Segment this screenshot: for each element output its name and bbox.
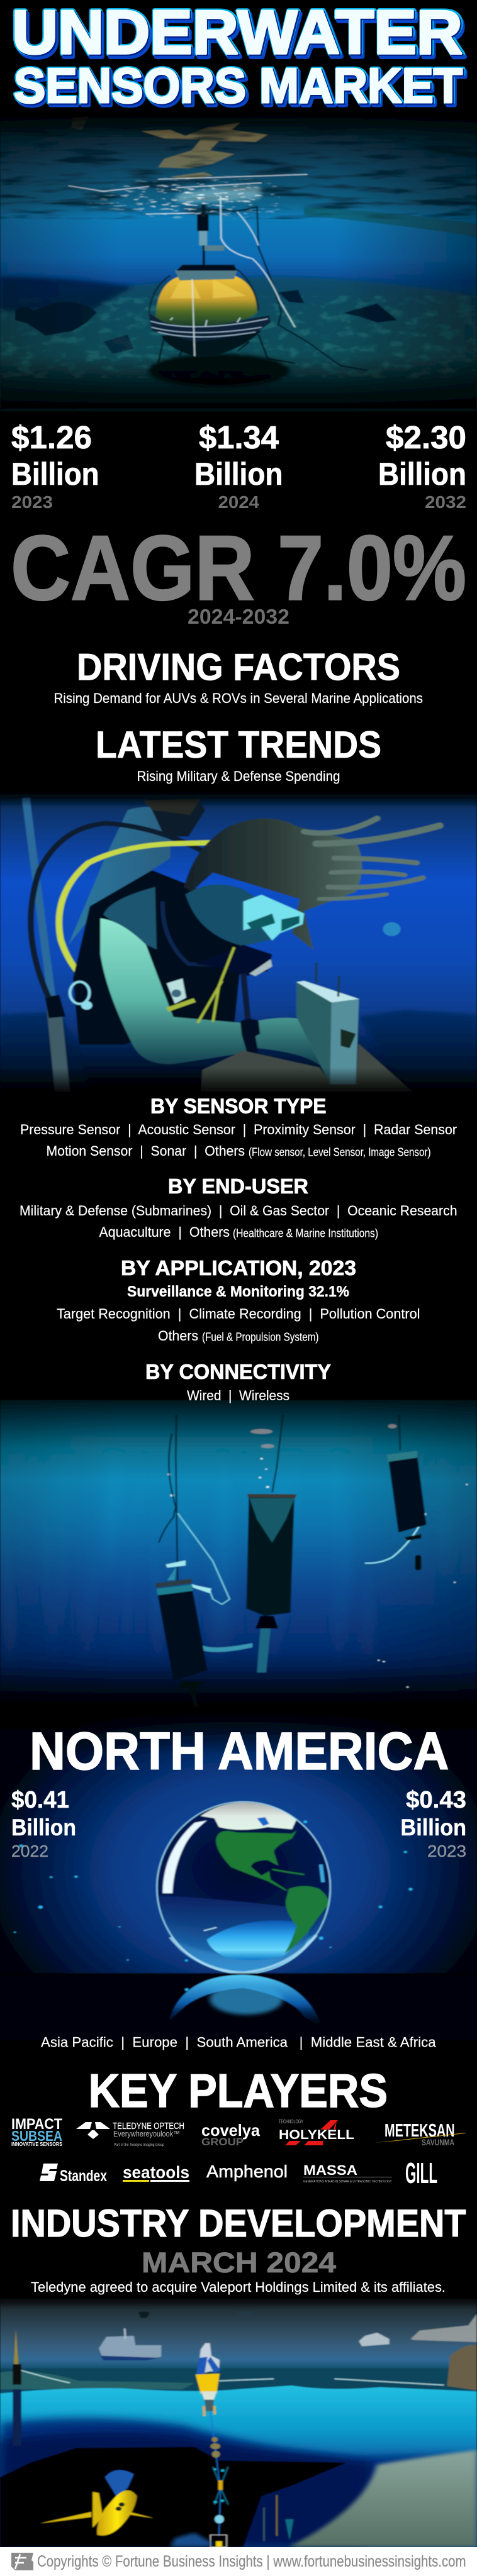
logo: massa: GENERATIONS AHEAD IN SONAR & ULTRASONIC TECHNOLOGY: [303, 2180, 392, 2184]
driving factors: Rising Demand for AUVs & ROVs in Several Marine Applications: [54, 690, 423, 706]
hanging sensors image: [0, 1400, 477, 1729]
driving factors: DRIVING FACTORS: [77, 646, 400, 688]
logo: massa: MASSA: [303, 2162, 357, 2178]
logo: holykell: TECHNOLOGY: [279, 2119, 303, 2125]
hero image: ocean sensor buoy: [0, 106, 477, 409]
by end-user: Aquaculture | Others: [99, 1224, 230, 1240]
logo: covelya: [201, 2121, 261, 2148]
cylinder middle: [246, 1494, 296, 1672]
north america 2022 value: [11, 1787, 76, 1860]
by end-user: [20, 1175, 457, 1240]
north america heading: NORTH AMERICA: [30, 1722, 449, 1781]
sensor block: [296, 963, 359, 1085]
logo: impact subsea: [11, 2116, 63, 2147]
stat 2032: 2032: [425, 492, 466, 512]
by sensor type: [20, 1095, 457, 1159]
by application: [57, 1256, 420, 1344]
coast: [410, 2314, 477, 2391]
logo: seatools: seatools: [123, 2163, 189, 2182]
north america 2022 value: Billion: [11, 1815, 76, 1840]
stat 2024: [194, 419, 283, 512]
particles: [14, 1820, 412, 1991]
title: underwater sensors market: [12, 0, 466, 116]
cylinder right: [387, 1451, 427, 1570]
north america 2023 value: 2023: [427, 1842, 466, 1860]
logo: covelya: GROUP: [201, 2136, 244, 2148]
logo: massa: [303, 2162, 392, 2184]
by end-user: Military & Defense (Submarines) | Oil & Gas Sector | Oceanic Research: [20, 1203, 457, 1219]
cagr: 2024-2032: [188, 605, 289, 628]
title: underwater sensors market: SENSORS MARKET: [15, 59, 464, 114]
stat 2024: $1.34: [199, 419, 279, 455]
latest trends: LATEST TRENDS: [96, 724, 381, 766]
sun reflection on surface: [72, 117, 267, 179]
globe: [157, 1802, 330, 1974]
market value stats: [11, 419, 466, 512]
hair: [184, 819, 439, 949]
logo: holykell: [279, 2119, 354, 2145]
driving factors: [54, 646, 423, 706]
logo: holykell: HOLYKELL: [279, 2128, 354, 2142]
glider: [40, 2470, 154, 2536]
logo: meteksan: SAVUNMA: [422, 2137, 454, 2147]
north america 2023 value: Billion: [400, 1815, 466, 1840]
north america 2023 value: $0.43: [406, 1787, 466, 1813]
by sensor type: BY SENSOR TYPE: [150, 1095, 327, 1118]
diver image: [0, 790, 477, 1094]
north america 2022 value: $0.41: [11, 1787, 69, 1813]
title: underwater sensors market: UNDERWATER: [14, 1, 466, 70]
title: underwater sensors market: SENSORS MARKET: [14, 58, 464, 113]
stat 2032: Billion: [378, 456, 466, 492]
by end-user: BY END-USER: [168, 1175, 308, 1198]
logo: covelya: covelya: [201, 2121, 261, 2140]
research ship: [99, 2328, 161, 2360]
title: underwater sensors market: SENSORS MARKET: [14, 58, 463, 113]
by sensor type: (Flow sensor, Level Sensor, Image Sensor): [249, 1146, 430, 1158]
stat 2024: Billion: [194, 456, 283, 492]
stat 2023: Billion: [11, 456, 99, 492]
cylinder left: [155, 1579, 208, 1707]
logo: impact subsea: INNOVATIVE SENSORS: [11, 2142, 63, 2147]
mooring line: [210, 2413, 228, 2547]
by application: (Fuel & Propulsion System): [202, 1330, 318, 1343]
logo: impact subsea: IMPACT: [11, 2116, 62, 2133]
fortune business insights logo: [11, 2553, 33, 2570]
other regions: Asia Pacific | Europe | South America | Middle East & Africa: [41, 2035, 436, 2050]
logo: teledyne optech: [76, 2121, 184, 2147]
stat 2024: 2024: [218, 492, 259, 512]
industry development: Teledyne agreed to acquire Valeport Holdings Limited & its affiliates.: [31, 2279, 446, 2295]
water body: [0, 2385, 477, 2547]
north america 2022 value: 2022: [11, 1842, 48, 1860]
infographic: underwater sensors market: GILL: [405, 2157, 437, 2189]
bubbles: [250, 1424, 396, 1448]
north america 2023 value: [400, 1787, 466, 1860]
footer: [0, 2547, 477, 2576]
by sensor type: Motion Sensor | Sonar | Others: [47, 1143, 245, 1159]
seabed: [0, 277, 477, 409]
stat 2032: [378, 419, 466, 512]
distant ships: [138, 2312, 253, 2318]
by end-user: (Healthcare & Marine Institutions): [233, 1227, 378, 1240]
logo: meteksan: [374, 2121, 466, 2147]
by application: Surveillance & Monitoring 32.1%: [127, 1283, 349, 1300]
seafloor instruments: [264, 2495, 293, 2541]
title: underwater sensors market: SENSORS MARKET: [16, 60, 466, 116]
key players heading: KEY PLAYERS: [89, 2064, 388, 2117]
logo: amphenol: Amphenol: [206, 2162, 288, 2181]
stat 2023: $1.26: [11, 419, 92, 455]
wired wireless text: Wired | Wireless: [187, 1388, 289, 1403]
latest trends: Rising Military & Defense Spending: [137, 768, 340, 784]
surface buoy: [196, 2343, 220, 2416]
by sensor type: Pressure Sensor | Acoustic Sensor | Proximity Sensor | Radar Sensor: [20, 1122, 457, 1137]
logo: teledyne optech: Everywhereyoulook™: [113, 2129, 180, 2138]
cruise ship: [359, 2333, 390, 2347]
reflection: [169, 1975, 322, 2028]
by application: Others: [158, 1328, 198, 1344]
by connectivity: BY CONNECTIVITY: [145, 1360, 331, 1383]
left spar buoy: [13, 2330, 21, 2446]
buoy: [149, 196, 368, 370]
logo: teledyne optech: TELEDYNE OPTECH: [113, 2121, 184, 2131]
stat 2023: 2023: [11, 492, 53, 512]
industry development: [11, 2202, 466, 2295]
by application: BY APPLICATION, 2023: [121, 1256, 356, 1280]
logo: teledyne optech: Part of the Teledyne Imaging Group: [114, 2143, 165, 2147]
logo: standex: [40, 2164, 107, 2185]
title: underwater sensors market: UNDERWATER: [13, 0, 464, 68]
logo: standex: Standex: [60, 2167, 107, 2185]
stat 2023: [11, 419, 99, 512]
by application: Target Recognition | Climate Recording | Pollution Control: [57, 1306, 420, 1322]
stat 2032: $2.30: [386, 419, 466, 455]
logo: impact subsea: SUBSEA: [11, 2128, 62, 2144]
cables: [159, 1415, 400, 1583]
latest trends: [96, 724, 381, 784]
ocean observing system image: [0, 2295, 477, 2547]
industry development: MARCH 2024: [142, 2247, 336, 2279]
north america globe panel: [0, 1710, 477, 2040]
